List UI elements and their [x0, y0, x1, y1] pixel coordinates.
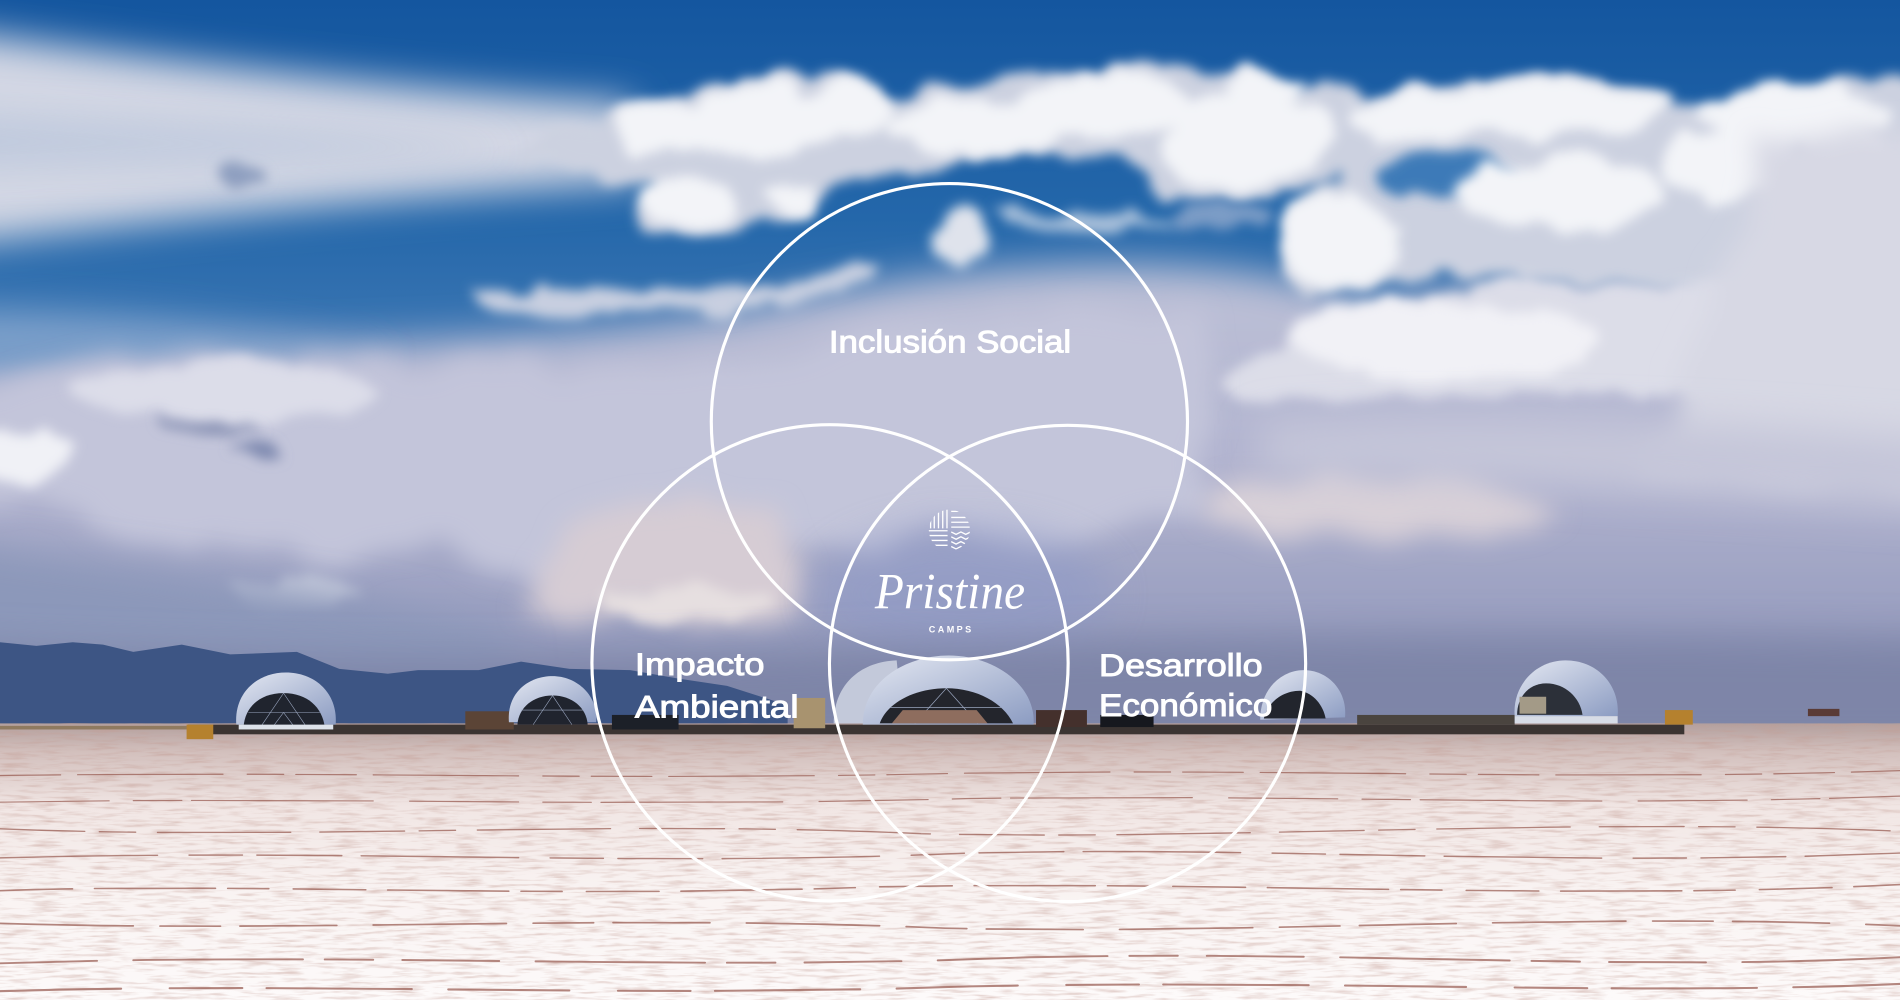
dome: behind centre — [834, 660, 903, 723]
circle: Desarrollo Económico — [829, 425, 1306, 902]
warm low clouds — [509, 498, 800, 621]
venn diagram — [592, 184, 1306, 902]
label: Impacto Ambiental — [635, 646, 799, 724]
dome: right of centre — [1260, 670, 1345, 720]
blue-grey low haze — [818, 527, 1109, 660]
blue gaps in the cloud band — [1375, 154, 1509, 198]
left mid clouds — [0, 308, 1212, 570]
circle: Impacto Ambiental — [592, 425, 1068, 901]
dome: second — [509, 676, 596, 725]
haze bank — [0, 230, 1900, 751]
horizon camp platform — [0, 698, 1839, 739]
label: Impacto Ambiental: Ambiental — [635, 688, 799, 724]
background: clouds — [0, 12, 1900, 751]
label: Desarrollo Económico: Económico — [1099, 687, 1272, 723]
label: Desarrollo Económico: Desarrollo — [1099, 647, 1263, 683]
cumulus band shadow — [503, 61, 1900, 351]
background: salt flat — [0, 723, 1900, 1000]
lower right cloud — [1224, 276, 1900, 412]
label: Inclusión Social: Inclusión Social — [829, 324, 1071, 360]
wordmark: CAMPS: CAMPS — [929, 625, 971, 635]
wordmark: Pristine: Pristine — [874, 564, 1025, 620]
logo: Pristine Camps — [874, 509, 1025, 635]
background: mountains — [0, 642, 788, 725]
dome: far right — [1515, 660, 1618, 723]
cumulus highlights — [612, 68, 1900, 288]
upper-left streak — [0, 12, 642, 261]
wisps — [473, 269, 885, 313]
icon: logo lines — [928, 509, 971, 549]
circle: Inclusión Social — [711, 184, 1188, 660]
label: Desarrollo Económico — [1099, 647, 1272, 723]
dome: centre — [863, 656, 1034, 725]
label: Impacto Ambiental: Impacto — [635, 646, 765, 682]
dome: far left — [236, 673, 336, 729]
background: sky — [0, 0, 1900, 727]
